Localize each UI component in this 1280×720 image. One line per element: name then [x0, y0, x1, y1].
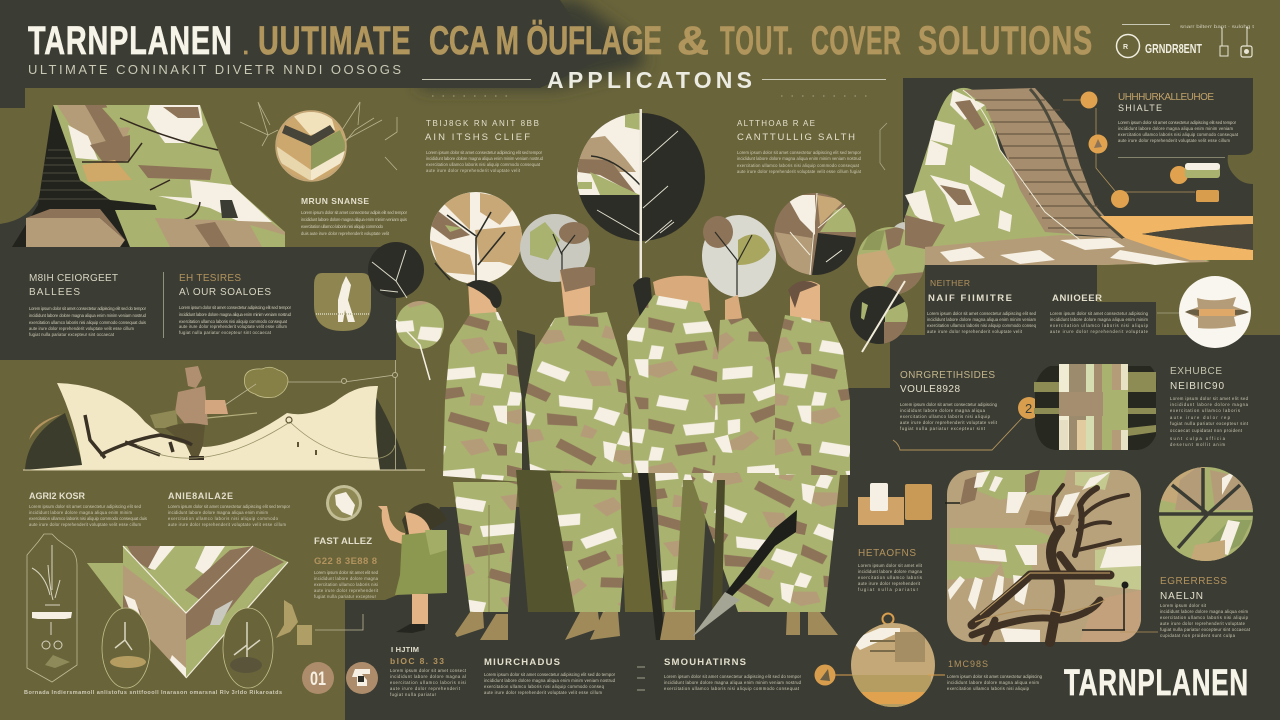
olive shadow legs — [516, 470, 595, 612]
text: top right: Lorem ipsum dolor sit amet consectetur adipiscing elit sed tempor — [1118, 120, 1237, 125]
text: aniioeer: Lorem ipsum dolor sit amet consectetur adipiscing — [1050, 311, 1149, 316]
text: images: Lorem ipsum dolor sit amet consectetur adipiscing — [947, 674, 1043, 679]
text: top centre right: exercitation ullamco laboris nisi aliquip commodo consequat — [737, 163, 860, 168]
badge: 01 — [302, 662, 334, 694]
text: murchadus: MIURCHADUS — [484, 657, 560, 668]
circle: dark leaf — [368, 242, 424, 298]
text: main anaset: exercitation ullamco laboris nisi aliquip commodo — [301, 224, 384, 229]
text: top right: aute irure dolor reprehenderit voluptate velit esse cillum — [1118, 138, 1230, 143]
text: main anaset: incididunt labore dolore magna aliqua enim minim veniam quis — [301, 217, 407, 222]
soldier 1 — [443, 280, 535, 640]
text: top centre left: AIN ITSHS CLIEF — [425, 132, 530, 143]
text: images: incididunt labore dolore magna aliqua enim — [947, 680, 1040, 685]
text: i hjtim — [390, 645, 467, 697]
title: TOUT. — [720, 18, 793, 62]
connector line — [315, 614, 363, 630]
text: fast allez: Lorem ipsum dolor sit amet elit sed — [314, 570, 379, 575]
text: aniioeer: ANIIOEER — [1052, 293, 1102, 304]
text: smouhatirns — [664, 657, 802, 691]
soldier 3 — [627, 276, 726, 640]
soldiers group — [443, 267, 850, 640]
text: i hjtim: Lorem ipsum dolor sit amet consect — [390, 668, 467, 673]
circle: large tree — [577, 109, 705, 279]
icon: camouflage pie — [1159, 467, 1253, 561]
text: exhubce: fugiat nulla pariatur excepteur sint — [1170, 421, 1249, 426]
icon: tan boxes — [858, 483, 932, 525]
text: main anaset: duis aute irure dolor reprehenderit voluptate velit — [301, 231, 390, 236]
text: left column: Lorem ipsum dolor sit amet consectetur adipiscing elit sed do tempor — [29, 306, 147, 311]
text: aniioeer: exercitation ullamco laboris nisi aliquip — [1050, 323, 1149, 328]
text: left column: exercitation ullamco laboris nisi aliquip commodo consequat duis — [29, 320, 146, 325]
text: onrgret: aute irure dolor reprehenderit voluptate velit — [900, 420, 998, 425]
text: images: exercitation ullamco laboris nisi aliquip — [947, 686, 1030, 691]
text: main anaset: Lorem ipsum dolor sit amet consectetur adipis elit sed tempor — [301, 210, 408, 215]
title: & — [677, 19, 709, 63]
circle: silver tree left — [520, 214, 590, 282]
divider — [162, 272, 164, 338]
text: agri kosr: aute irure dolor reprehenderit voluptate velit esse cillum — [29, 522, 142, 527]
text: fast allez — [314, 536, 379, 599]
text: fast allez: fugiat nulla pariatur excepteur — [314, 594, 377, 599]
text: left column — [29, 273, 147, 337]
text: onrgret — [900, 370, 998, 431]
circle: silver tree right — [702, 215, 776, 297]
callout: number 2 — [893, 397, 1040, 450]
title: TARNPLANEN — [28, 18, 232, 63]
text: top centre right: incididunt labore dolore magna aliqua enim minim veniam nostrud — [737, 156, 862, 161]
text: left column: M8IH CEIORGEET — [29, 273, 118, 284]
text: onrgret: incididunt labore dolore magna aliqua — [900, 408, 986, 413]
illustration: camouflage tent — [0, 105, 285, 247]
text: neither: NAIF FIIMITRE — [928, 293, 1012, 304]
title: . — [243, 37, 249, 59]
text: second column: fugiat nulla pariatur excepteur sint occaecat — [179, 330, 272, 335]
text: anie bailas — [168, 491, 291, 527]
soldier 5 — [775, 281, 850, 635]
text: anie bailas: aute irure dolor reprehenderit voluptate velit esse cillum — [168, 522, 286, 527]
icon: orb — [851, 614, 945, 707]
text: anie bailas: ANIE8AILA2E — [168, 491, 233, 501]
illustration: camouflage panel with branch — [945, 470, 1158, 642]
text: agri kosr: Lorem ipsum dolor sit amet consectetur adipiscing elit sed — [29, 504, 142, 509]
text: murchadus: incididunt labore dolore magna aliqua enim minim veniam nostrud — [484, 678, 616, 683]
text: exhubce: exercitation ullamco laboris — [1170, 408, 1240, 413]
soldier 4 — [690, 295, 790, 612]
text: neither — [927, 278, 1037, 334]
text: exhubce: NEIBIIC90 — [1170, 381, 1224, 392]
text: top centre right: CANTTULLIG SALTH — [737, 132, 855, 143]
text: top right: UHHHURKALLEUHOE — [1118, 92, 1214, 103]
text: images — [947, 659, 1043, 691]
illustration: hill with soldier — [23, 360, 425, 470]
text: second column: A\ OUR SOALOES — [179, 287, 271, 298]
text: murchadus: Lorem ipsum dolor sit amet consectetur adipiscing elit sed do tempor — [484, 672, 616, 677]
text: egrerress: incididunt labore dolore magna aliqua enim — [1160, 609, 1248, 614]
text: left column: aute irure dolor reprehenderit voluptate velit esse cillum — [29, 326, 134, 331]
text: fast allez: aute irure dolor reprehenderit — [314, 588, 379, 593]
text: egrerress: EGRERRESS — [1160, 576, 1227, 587]
text: top centre right: aute irure dolor reprehenderit voluptate velit esse cillum fugiat — [737, 169, 862, 174]
text: exhubce — [1170, 366, 1249, 447]
text: smouhatirns: Lorem ipsum dolor sit amet consectetur adipiscing elit sed do tempor — [664, 674, 802, 679]
text: fast allez: FAST ALLEZ — [314, 536, 372, 547]
circle: silver small — [891, 222, 919, 250]
text: hetaofns: aute irure dolor reprehenderit — [858, 581, 921, 586]
badge: 01: 01 — [310, 669, 326, 690]
title: CCA M ÖUFLAGE — [429, 18, 662, 63]
text: anie bailas: Lorem ipsum dolor sit amet consectetur adipiscing elit sed tempor — [168, 504, 291, 509]
illustration: camouflage curtain — [904, 88, 1210, 265]
text: egrerress: cupidatat non proident sunt culpa — [1160, 633, 1236, 638]
text: second column: aute irure dolor reprehenderit voluptate velit esse cillum — [179, 324, 288, 329]
text: agri kosr — [29, 491, 147, 527]
text: i hjtim: bIOC 8. 33 — [390, 656, 444, 666]
text: i hjtim: aute irure dolor reprehenderit — [390, 686, 461, 691]
text: egrerress: Lorem ipsum dolor sit — [1160, 603, 1207, 608]
text: anie bailas: exercitation ullamco laboris nisi aliquip commodo — [168, 516, 279, 521]
text: egrerress: NAELJN — [1160, 591, 1203, 602]
text: anie bailas: incididunt labore dolore magna aliqua enim minim — [168, 510, 268, 515]
text: fast allez: exercitation ullamco laboris nisi — [314, 582, 378, 587]
circle: brown tree — [774, 193, 860, 275]
badge icon — [326, 485, 362, 521]
text: hetaofns: exercitation ullamco laboris — [858, 575, 922, 580]
text: top centre left — [425, 119, 544, 173]
text: murchadus: aute irure dolor reprehenderit voluptate velit esse cillum — [484, 690, 602, 695]
text: i hjtim: I HJTIM — [391, 645, 419, 654]
subtitle: ULTIMATE CONINAKIT DIVETR NNDI OOSOGS — [28, 62, 401, 77]
text: exhubce: Lorem ipsum dolor sit amet elit sed — [1170, 396, 1249, 401]
text: onrgret: exercitation ullamco laboris nisi aliquip — [900, 414, 991, 419]
logo block — [1116, 24, 1255, 58]
text: main anaset — [301, 196, 408, 236]
section heading: applications: APPLICATONS — [547, 67, 752, 93]
text: exhubce: occaecat cupidatat non proident — [1170, 428, 1243, 433]
text: egrerress: exercitation ullamco laboris nisi aliquip — [1160, 615, 1249, 620]
text: second column: exercitation ullamco laboris nisi aliquip commodo consequat — [179, 319, 288, 324]
circle: tan tree — [430, 192, 525, 284]
title: UUTIMATE — [258, 18, 411, 63]
text: images: 1MC98S — [948, 659, 988, 669]
icon: figure tile — [314, 273, 371, 331]
text: neither: NEITHER — [930, 278, 970, 288]
text: agri kosr: incididunt labore dolore magna aliqua enim minim — [29, 510, 132, 515]
text: onrgret: VOULE8928 — [900, 384, 960, 395]
text: agri kosr: AGRI2 KOSR — [29, 491, 86, 501]
girl figure — [378, 503, 447, 633]
connectors and orange nodes — [1063, 92, 1225, 208]
text: onrgret: ONRGRETIHSIDES — [900, 370, 995, 381]
text: top centre left: exercitation ullamco laboris nisi aliquip commodo consequat — [426, 162, 541, 167]
orange sweep — [1100, 216, 1253, 260]
text: fast allez: incididunt labore dolore magna — [314, 576, 379, 581]
text: i hjtim: incididunt labore dolore magna al — [390, 674, 466, 679]
text: onrgret: fugiat nulla pariatur excepteur sint — [900, 426, 986, 431]
text: left column: incididunt labore dolore magna aliqua enim minim veniam nostrud — [29, 313, 147, 318]
text: aniioeer — [1050, 293, 1149, 334]
title: SOLUTIONS — [918, 18, 1092, 63]
text: egrerress: aute irure dolor reprehenderit voluptate — [1160, 621, 1246, 626]
logo block: snarr bilterr bant · sulohg t — [1180, 24, 1255, 29]
caption: Bornada Indiersmamoll anlistofus snttfoooll Inarason omarsnal Rlv 3rIdo Rikaroatds — [24, 690, 282, 696]
text: hetaofns: fugiat nulla pariatur — [858, 587, 919, 592]
text: top centre right — [737, 119, 862, 174]
text: top right: incididunt labore dolore magna aliqua enim minim veniam — [1118, 126, 1234, 131]
dashes — [637, 667, 645, 690]
text: exhubce: deserunt mollit anim — [1170, 442, 1226, 447]
text: top centre right: Lorem ipsum dolor sit amet consectetur adipiscing elit sed tempor — [737, 150, 862, 155]
text: agri kosr: exercitation ullamco laboris nisi aliquip commodo consequat duis — [29, 516, 147, 521]
text: hetaofns — [858, 548, 923, 592]
icon: orange marker — [814, 664, 860, 686]
text: smouhatirns: incididunt labore dolore magna aliqua enim minim veniam nostrud — [664, 680, 802, 685]
text: exhubce: incididunt labore dolore magna — [1170, 402, 1249, 407]
text: smouhatirns: exercitation ullamco laboris nisi aliquip commodo consequat — [664, 686, 800, 691]
soldier 2 — [525, 267, 665, 640]
icon: bottle specimen — [27, 534, 77, 682]
text: hetaofns: HETAOFNS — [858, 548, 916, 559]
text: top right: SHIALTE — [1118, 103, 1162, 113]
sword — [692, 510, 797, 637]
text: second column — [179, 273, 292, 335]
text: top centre left: Lorem ipsum dolor sit amet consectetur adipiscing elit sed tempor — [426, 150, 543, 155]
icon: plant in oval right — [223, 608, 273, 688]
text: top centre left: incididunt labore dolore magna aliqua enim minim veniam nostrud — [426, 156, 544, 161]
text: smouhatirns: SMOUHATIRNS — [664, 657, 746, 668]
text: neither: exercitation ullamco laboris nisi aliquip commodo conseq — [927, 323, 1037, 328]
title — [28, 18, 1092, 64]
text: hetaofns: Lorem ipsum dolor sit amet elit — [858, 563, 923, 568]
text: murchadus — [484, 657, 616, 695]
icon: white circle with hide — [1157, 276, 1251, 348]
text: top right: exercitation ullamco laboris nisi aliquip commodo consequat — [1118, 132, 1239, 137]
text: fast allez: G22 8 3E88 8 — [314, 556, 377, 567]
text: aniioeer: aute irure dolor reprehenderit voluptate — [1050, 329, 1149, 334]
text: top centre left: aute irure dolor reprehenderit voluptate velit — [426, 168, 521, 173]
text: egrerress — [1160, 576, 1251, 638]
icon: plant in oval left — [102, 608, 150, 688]
text: left column: BALLEES — [29, 287, 80, 298]
icon: woven camouflage — [1034, 364, 1156, 450]
text: main anaset: MRUN SNANSE — [301, 196, 369, 206]
circle: camo leaf — [396, 301, 444, 380]
text: i hjtim: fugiat nulla pariatur — [390, 692, 437, 697]
text: left column: fugiat nulla pariatur excepteur sint occaecat — [29, 332, 115, 337]
text: onrgret: Lorem ipsum dolor sit amet consectetur adipiscing — [900, 402, 998, 407]
text: i hjtim: exercitation ullamco laboris nisi — [390, 680, 466, 685]
text: hetaofns: incididunt labore dolore magna — [858, 569, 923, 574]
badge: icon — [346, 662, 378, 694]
text: top right — [1118, 92, 1239, 143]
bracket — [880, 123, 887, 170]
illustration: camouflage fold — [87, 546, 288, 678]
callout: number 2: 2 — [1025, 401, 1032, 416]
text: exhubce: EXHUBCE — [1170, 366, 1222, 377]
logo block: GRNDR8ENT — [1145, 41, 1202, 56]
text: second column: EH TESIRES — [179, 273, 241, 284]
text: exhubce: sunt culpa officia — [1170, 436, 1226, 441]
footer brand: TARNPLANEN — [1064, 661, 1248, 703]
text: murchadus: exercitation ullamco laboris nisi aliquip commodo conseq — [484, 684, 605, 689]
logo block: R — [1123, 44, 1128, 51]
circle: dark with branch — [850, 281, 910, 352]
text: neither: aute irure dolor reprehenderit voluptate velit — [927, 329, 1023, 334]
text: top centre left: TBIJ8GK RN ANIT 8BB — [426, 119, 539, 128]
title: COVER — [811, 19, 901, 64]
circle: camo right — [857, 225, 925, 295]
ornament — [276, 600, 312, 645]
text: neither: Lorem ipsum dolor sit amet consectetur adipiscing elit sed — [927, 311, 1037, 316]
icon: layered circle with antlers — [240, 102, 397, 181]
text: neither: incididunt labore dolore magna aliqua enim minim veniam — [927, 317, 1036, 322]
text: second column: incididunt labore dolore magna aliqua enim minim veniam nostrud — [179, 312, 292, 317]
text: top centre right: ALTTHOAB R AE — [737, 119, 815, 128]
text: aniioeer: incididunt labore dolore magna aliqua enim minim — [1050, 317, 1148, 322]
text: second column: Lorem ipsum dolor sit amet consectetur adipiscing elit sed tempor — [179, 305, 292, 310]
text: exhubce: aute irure dolor rep — [1170, 415, 1231, 420]
text: egrerress: fugiat nulla pariatur excepteur sint occaecat — [1160, 627, 1251, 632]
